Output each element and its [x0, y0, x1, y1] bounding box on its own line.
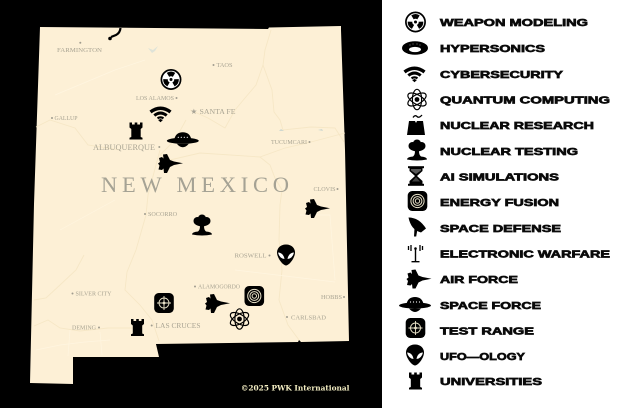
place labels: [51, 42, 345, 331]
place labels: GALLUP: [54, 116, 78, 122]
legend: weapon modeling: [406, 12, 588, 32]
place labels: LAS CRUCES: [156, 321, 200, 330]
legend: test range: TEST RANGE: [440, 326, 534, 338]
legend: ai simulations: AI SIMULATIONS: [440, 172, 559, 184]
legend: universities: [409, 372, 542, 390]
icon: air force marker: [205, 294, 230, 313]
place labels: ALBUQUERQUE: [93, 143, 155, 152]
legend: space defense: SPACE DEFENSE: [440, 224, 561, 235]
legend: nuclear research: NUCLEAR RESEARCH: [440, 121, 594, 132]
legend: cybersecurity: [404, 68, 563, 82]
legend: air force: AIR FORCE: [440, 275, 518, 286]
legend: hypersonics: [402, 41, 545, 55]
legend: weapon modeling: WEAPON MODELING: [440, 18, 588, 29]
icon: air force marker: [158, 154, 183, 173]
icon: space force marker: [167, 132, 199, 147]
legend: test range: [406, 318, 534, 338]
legend: hypersonics: HYPERSONICS: [440, 44, 545, 55]
place labels: SILVER CITY: [76, 292, 112, 298]
state name: NEW MEXICO: [101, 172, 289, 197]
place labels: ★: [190, 107, 198, 116]
place labels: FARMINGTON: [57, 48, 103, 54]
legend: ai simulations: [408, 166, 559, 186]
icon: test range marker: [154, 293, 174, 313]
legend: ufo-ology: [406, 344, 525, 366]
legend: air force: [406, 270, 518, 288]
legend: energy fusion: ENERGY FUSION: [440, 198, 559, 209]
place labels: TAOS: [216, 63, 232, 69]
place labels: CLOVIS: [314, 187, 336, 193]
place labels: DEMING: [72, 326, 97, 332]
icon: nuclear testing marker: [192, 214, 212, 236]
icon: energy fusion marker: [244, 286, 264, 306]
legend: space force: [399, 297, 541, 312]
place labels: ALAMOGORDO: [198, 284, 241, 290]
legend: nuclear testing: [407, 140, 578, 160]
icon: ufo-ology marker: [277, 244, 295, 266]
icon: weapon modeling marker: [161, 70, 181, 89]
map icons: [130, 70, 330, 336]
icon: quantum computing marker: [228, 309, 251, 329]
map of New Mexico: [30, 26, 349, 384]
legend: quantum computing: QUANTUM COMPUTING: [440, 96, 610, 106]
legend: cybersecurity: CYBERSECURITY: [440, 70, 563, 81]
legend: quantum computing: [406, 89, 610, 110]
legend: energy fusion: [408, 191, 559, 211]
legend: [399, 12, 610, 390]
legend: nuclear research: [407, 115, 594, 135]
copyright: ©2025 PWK International: [241, 384, 350, 392]
place labels: ROSWELL: [234, 254, 267, 260]
legend: electronic warfare: [408, 245, 610, 262]
place labels: CARLSBAD: [291, 314, 326, 322]
place labels: TUCUMCARI: [271, 140, 307, 146]
place labels: LOS ALAMOS: [136, 96, 174, 102]
place labels: SOCORRO: [148, 212, 178, 218]
legend: space force: SPACE FORCE: [440, 301, 541, 312]
icon: cybersecurity marker: [150, 108, 170, 122]
legend: ufo-ology: UFO—OLOGY: [440, 352, 525, 363]
legend: space defense: [408, 218, 561, 236]
place labels: HOBBS: [321, 295, 342, 301]
legend: electronic warfare: ELECTRONIC WARFARE: [440, 250, 610, 260]
icon: university marker: [130, 122, 142, 140]
icon: university marker: [131, 319, 144, 336]
legend: universities: UNIVERSITIES: [440, 377, 542, 388]
legend: nuclear testing: NUCLEAR TESTING: [440, 147, 578, 158]
black map panel: [0, 0, 382, 408]
place labels: SANTA FE: [200, 108, 236, 116]
icon: air force marker: [305, 199, 330, 218]
